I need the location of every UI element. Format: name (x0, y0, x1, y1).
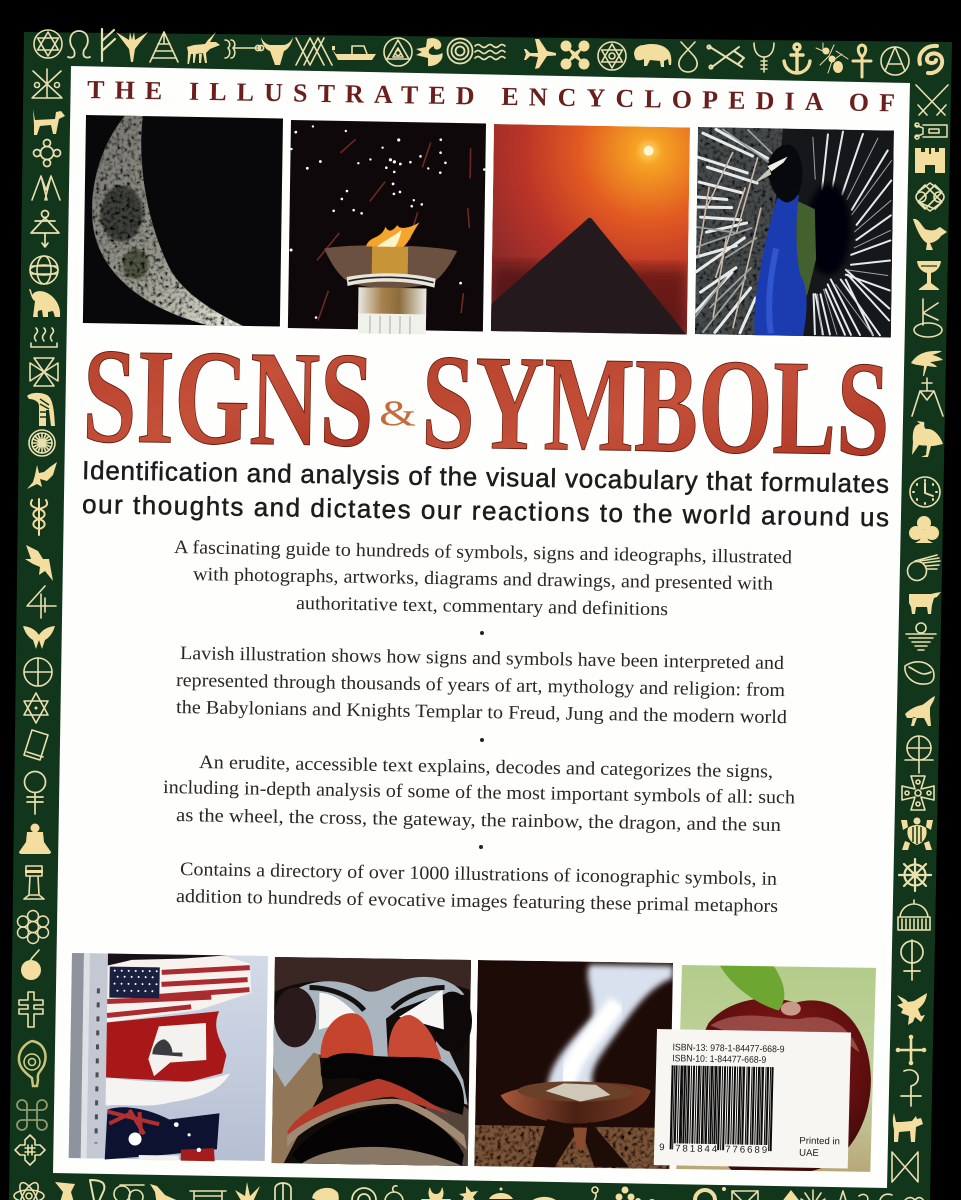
icon: seated Buddha (19, 824, 51, 854)
icon: asterisk triangle (32, 69, 62, 98)
icon: waves (475, 44, 505, 60)
icon: crossed swords (916, 85, 948, 115)
icon: alchemy sign (31, 210, 59, 247)
icon: small cross (897, 1036, 925, 1064)
icon: apple leaf (719, 966, 785, 1011)
icon: bat (25, 545, 53, 581)
icon: round pot (312, 1188, 339, 1200)
subtitle (82, 455, 889, 532)
icon: dog (33, 109, 65, 135)
photo: pyramid at sunset (491, 124, 690, 336)
icon: small sign (648, 1199, 656, 1200)
icon: clock (910, 477, 940, 507)
barcode: 776689 (725, 1144, 767, 1156)
icon: wheel (29, 430, 55, 456)
icon: bird (150, 1184, 183, 1200)
icon: tree (781, 1190, 801, 1200)
icon: turtle figure (901, 818, 933, 850)
icon: anchor (784, 44, 810, 73)
icon: griffin (27, 462, 57, 489)
icon: winged figure (116, 32, 148, 62)
icon: double cross (19, 992, 43, 1027)
icon: tablet (24, 730, 48, 760)
photo: peacock (695, 127, 894, 339)
icon: endless knot (916, 183, 944, 211)
icon: dharma wheel (899, 859, 931, 891)
icon: bowl hat (487, 1188, 515, 1200)
text block: first paragraph: with photographs, artworks, diagrams and drawings, and presented with (193, 564, 774, 595)
icon: crossed lines (296, 38, 332, 65)
icon: ankh (853, 45, 871, 77)
photo: red apple (676, 965, 876, 1172)
icon: hourglass square (892, 1152, 918, 1182)
icon: bird (527, 1197, 561, 1200)
icon: venus with stem (901, 940, 923, 980)
icon: atom (14, 1180, 44, 1200)
icon: harp (90, 1180, 104, 1200)
icon: cherry apple (21, 950, 41, 980)
icon: castle (915, 148, 945, 173)
icon: cow (909, 592, 941, 614)
icon: concentric circles (448, 38, 472, 64)
icon: cat (893, 1113, 923, 1142)
icon: four circles (34, 140, 60, 166)
text: printed in: Printed in (799, 1136, 840, 1147)
icon: ornate cross (15, 1135, 45, 1165)
icon: seven circles (18, 910, 48, 944)
icon: howling wolf (905, 696, 935, 726)
text block: second paragraph: represented through thousands of years of art, mythology and religion: from (176, 670, 785, 701)
heading: series title: THE ILLUSTRATED ENCYCLOPEDIA OF (87, 75, 895, 117)
icon: C curve (880, 1194, 892, 1200)
icon: looped square knot (17, 1100, 47, 1130)
icon: ankh line (592, 1187, 598, 1200)
icon: scroll (114, 1185, 144, 1200)
border: left column of symbols (15, 69, 65, 1165)
icon: double curve (903, 1198, 925, 1200)
barcode (659, 1065, 773, 1156)
icon: eyes (274, 987, 317, 1048)
subtitle: our thoughts and dictates our reactions to the world around us (82, 489, 889, 532)
heading: main title: & (379, 393, 417, 434)
text block: third paragraph: An erudite, accessible text explains, decodes and categorizes the signs, (199, 752, 773, 783)
icon: cross on triangle (912, 378, 943, 416)
icon: cross circle on stem (905, 736, 933, 773)
text block: fourth paragraph: Contains a directory of over 1000 illustrations of iconographic symbols, in (180, 859, 778, 890)
text block: second paragraph: the Babylonians and Knights Templar to Freud, Jung and the modern world (176, 697, 788, 728)
icon: fleur (616, 1186, 641, 1200)
icon: conch shell (19, 1041, 46, 1086)
icon: ant (816, 43, 848, 73)
icon: deer (187, 32, 220, 64)
icon: leaf (235, 1182, 260, 1200)
text block: first paragraph: A fascinating guide to hundreds of symbols, signs and ideographs, illustrated (174, 537, 793, 568)
icon: red lips (287, 1077, 451, 1142)
icon: omega (68, 31, 90, 58)
icon: black moustache (320, 1053, 465, 1115)
icon: smoke (548, 964, 673, 1093)
photo: olympic flame (288, 120, 486, 336)
icon: venus sign (24, 772, 46, 814)
icon: cowrie (905, 662, 934, 684)
icon: box (190, 1191, 226, 1200)
text block: third paragraph: as the wheel, the cross, the gateway, the rainbow, the dragon, and the sun (176, 805, 782, 836)
icon: Australian flag (105, 1107, 220, 1161)
text block: fourth paragraph: addition to hundreds of evocative images featuring these primal metaphors (176, 886, 778, 917)
icon: dome (898, 900, 930, 930)
icon: red cheeks (320, 1013, 374, 1058)
icon: peacock body (796, 201, 816, 296)
icon: hourglass box (30, 358, 58, 386)
text block: fourth paragraph (176, 859, 778, 917)
icon: dot (722, 1187, 726, 1191)
icon: K with oval (914, 299, 942, 337)
icon: triangle stem (839, 1191, 847, 1200)
icon: hen (913, 219, 947, 250)
icon: ribbon loop (679, 42, 697, 72)
icon: heron (912, 421, 943, 457)
icon: bull head (261, 37, 293, 65)
icon: gold ring (695, 1190, 715, 1200)
icon: sun rays (801, 1190, 825, 1200)
heading: main title (82, 321, 891, 485)
heading: main title: SIGNS (82, 321, 375, 476)
icon: flame (366, 221, 420, 247)
bullet (480, 631, 484, 635)
photo: flags (69, 953, 268, 1162)
border: top row of symbols (34, 29, 942, 77)
icon: winged figure (459, 1186, 478, 1200)
icon: American flag (107, 954, 252, 1025)
icon: globe (30, 256, 58, 284)
icon: circled cross (24, 658, 52, 686)
icon: caduceus (31, 499, 47, 535)
icon: star in circle (598, 42, 626, 70)
icon: loop (385, 1186, 403, 1200)
icon: airplane (524, 39, 556, 69)
border: bottom row of symbols (14, 1180, 925, 1200)
text: printed in (799, 1136, 840, 1159)
text: ISBN numbers: ISBN-10: 1-84477-668-9 (672, 1053, 766, 1066)
text: ISBN numbers (672, 1042, 785, 1066)
icon: elephant (29, 289, 60, 317)
icon: number 4 with cross (27, 586, 56, 618)
text block: first paragraph (174, 537, 793, 620)
icon: double M (32, 176, 60, 200)
text: ISBN numbers: ISBN-13: 978-1-84477-668-9 (672, 1042, 785, 1055)
text: printed in: UAE (799, 1148, 819, 1159)
icon: Egyptian figure (27, 393, 55, 426)
icon: torch bowl (324, 244, 457, 290)
icon: crossed keys (707, 45, 744, 69)
icon: hexagram circle (34, 30, 62, 58)
icon: ladder triangle (150, 32, 178, 62)
icon: boat (332, 46, 376, 60)
icon: anarchy circle (881, 47, 909, 75)
photo: crescent moon (83, 115, 283, 327)
icon: quatrefoil knot (560, 40, 590, 70)
icon: trident (754, 43, 774, 72)
border: right column of symbols (892, 85, 948, 1182)
icon: butterfly (23, 626, 55, 649)
icon: scroll (915, 123, 947, 139)
text block: second paragraph: Lavish illustration shows how signs and symbols have been interpreted and (180, 643, 785, 674)
panel: barcode label (654, 1029, 851, 1168)
icon: steam (31, 328, 57, 347)
text block: third paragraph (163, 752, 796, 836)
barcode: 781844 (675, 1143, 718, 1155)
icon: club suit (909, 516, 939, 543)
icon: spiral circle (352, 1188, 376, 1200)
icon: swirl bird (416, 38, 443, 66)
icon: torch column (358, 287, 427, 316)
icon: hook (859, 1194, 868, 1200)
icon: branching key (225, 40, 264, 58)
photo: totem pole face (272, 957, 473, 1166)
subtitle: Identification and analysis of the visual vocabulary that formulates (82, 455, 889, 499)
icon: Maltese cross (902, 776, 934, 810)
icon: horned head (421, 1187, 451, 1200)
icon: crescent cross (901, 1070, 921, 1106)
icon: sun on water (906, 623, 936, 650)
text block: third paragraph: including in-depth analysis of some of the most important symbols of all: such (163, 777, 796, 808)
bullet (479, 845, 483, 849)
text block: first paragraph: authoritative text, commentary and definitions (296, 593, 668, 620)
icon: lighthouse (24, 866, 44, 899)
icon: comet circle (908, 555, 940, 580)
bullet (480, 738, 484, 742)
icon: boxed X (732, 1191, 758, 1200)
icon: red and white flag (106, 1010, 231, 1107)
barcode: 9 (659, 1142, 665, 1153)
photo: smoking incense bowl (474, 960, 673, 1169)
icon: rune (102, 29, 115, 61)
icon: spiral (919, 46, 942, 73)
icon: arch (275, 1183, 291, 1200)
icon: star of David (24, 693, 48, 723)
icon: griffin (897, 993, 927, 1025)
icon: chalice (917, 261, 941, 290)
icon: triangle in circle (384, 38, 412, 66)
icon: griffin (55, 1182, 75, 1200)
icon: mouth (292, 1103, 465, 1166)
icon: buffalo (634, 44, 671, 67)
icon: bowl on tripod (499, 1080, 651, 1169)
text block: second paragraph (176, 643, 788, 728)
icon: tree (911, 351, 943, 376)
